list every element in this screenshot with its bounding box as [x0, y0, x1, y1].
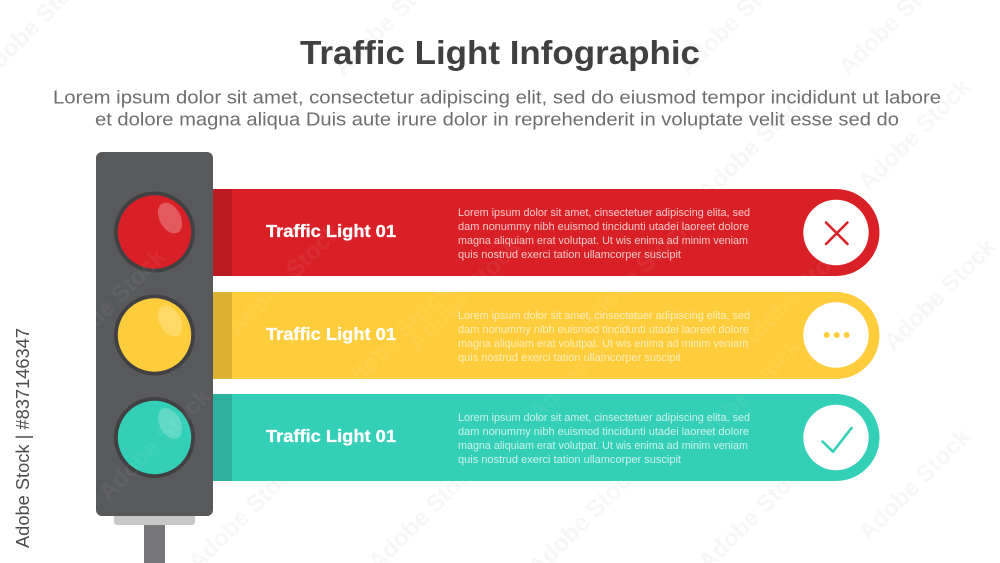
banner text: green	[458, 412, 750, 466]
traffic light housing	[96, 152, 213, 516]
icon: dots	[803, 302, 869, 368]
banner: green	[213, 394, 880, 481]
banner text: yellow: Lorem ipsum dolor sit amet, cinsectetuer adipiscing elita, sed	[458, 310, 750, 322]
banner heading: green: Traffic Light 01	[266, 426, 396, 446]
lamp: red	[114, 192, 195, 272]
banner text: green: quis nostrud exerci tation ullamcorper suscipit	[458, 454, 681, 466]
banner text: red	[458, 207, 750, 261]
stock watermarks on the white background: Adobe Stock	[878, 233, 1000, 356]
subtitle text	[53, 88, 941, 130]
banner text: yellow	[458, 310, 750, 364]
banner text: green: magna aliquiam erat volutpat. Ut wis enima ad minim veniam	[458, 440, 748, 452]
stock watermarks on the coloured panels: Adobe Stock	[573, 213, 697, 336]
stock watermarks on the coloured panels: Adobe Stock	[733, 233, 857, 356]
icon: check	[803, 405, 869, 470]
stock watermarks on the coloured panels: Adobe Stock	[48, 243, 172, 366]
stock watermarks on the white background: Adobe Stock	[853, 423, 977, 546]
traffic light pole	[144, 525, 165, 563]
traffic light base plate	[114, 515, 195, 525]
banner text: yellow: quis nostrud exerci tation ullamcorper suscipit	[458, 352, 681, 364]
banner text: red: magna aliquiam erat volutpat. Ut wis enima ad minim veniam	[458, 235, 748, 247]
stock watermarks on the coloured panels: Adobe Stock	[683, 333, 807, 456]
banner heading: yellow: Traffic Light 01	[266, 324, 396, 344]
icon: cross	[803, 200, 869, 265]
stock watermarks on the white background: Adobe Stock	[853, 73, 977, 196]
stock watermarks on the white background: Adobe Stock	[693, 83, 817, 206]
banner text: red: Lorem ipsum dolor sit amet, cinsectetuer adipiscing elita, sed	[458, 207, 750, 219]
banner: yellow	[213, 292, 880, 379]
stock watermarks on the coloured panels	[48, 213, 857, 506]
stock credit: Adobe Stock | #837146347	[12, 328, 33, 548]
lamp: yellow	[114, 294, 195, 376]
banner text: red: dam nonummy nibh euismod tincidunti utadei laoreet dolore	[458, 221, 749, 233]
lamp: green	[114, 397, 195, 478]
banner text: red: quis nostrud exerci tation ullamcorper suscipit	[458, 249, 681, 261]
stock watermarks on the coloured panels: Adobe Stock	[523, 303, 647, 426]
banner text: green: dam nonummy nibh euismod tincidunti utadei laoreet dolore	[458, 426, 749, 438]
stock watermarks on the coloured panels: Adobe Stock	[93, 383, 217, 506]
title: Traffic Light Infographic	[300, 34, 700, 71]
banner: red	[213, 189, 880, 276]
banner text: green: Lorem ipsum dolor sit amet, cinsectetuer adipiscing elita, sed	[458, 412, 750, 424]
stock watermarks on the coloured panels: Adobe Stock	[333, 278, 457, 401]
stock watermarks on the coloured panels: Adobe Stock	[403, 233, 527, 356]
subtitle text: Lorem ipsum dolor sit amet, consectetur adipiscing elit, sed do eiusmod tempor incididunt ut labore	[53, 88, 941, 108]
banner text: yellow: magna aliquiam erat volutpat. Ut wis enima ad minim veniam	[458, 338, 748, 350]
banner text: yellow: dam nonummy nibh euismod tincidunti utadei laoreet dolore	[458, 324, 749, 336]
subtitle text: et dolore magna aliqua Duis aute irure dolor in reprehenderit in voluptate velit esse sed do	[95, 110, 899, 130]
banner heading: red: Traffic Light 01	[266, 221, 396, 241]
stock watermarks on the coloured panels: Adobe Stock	[223, 218, 347, 341]
